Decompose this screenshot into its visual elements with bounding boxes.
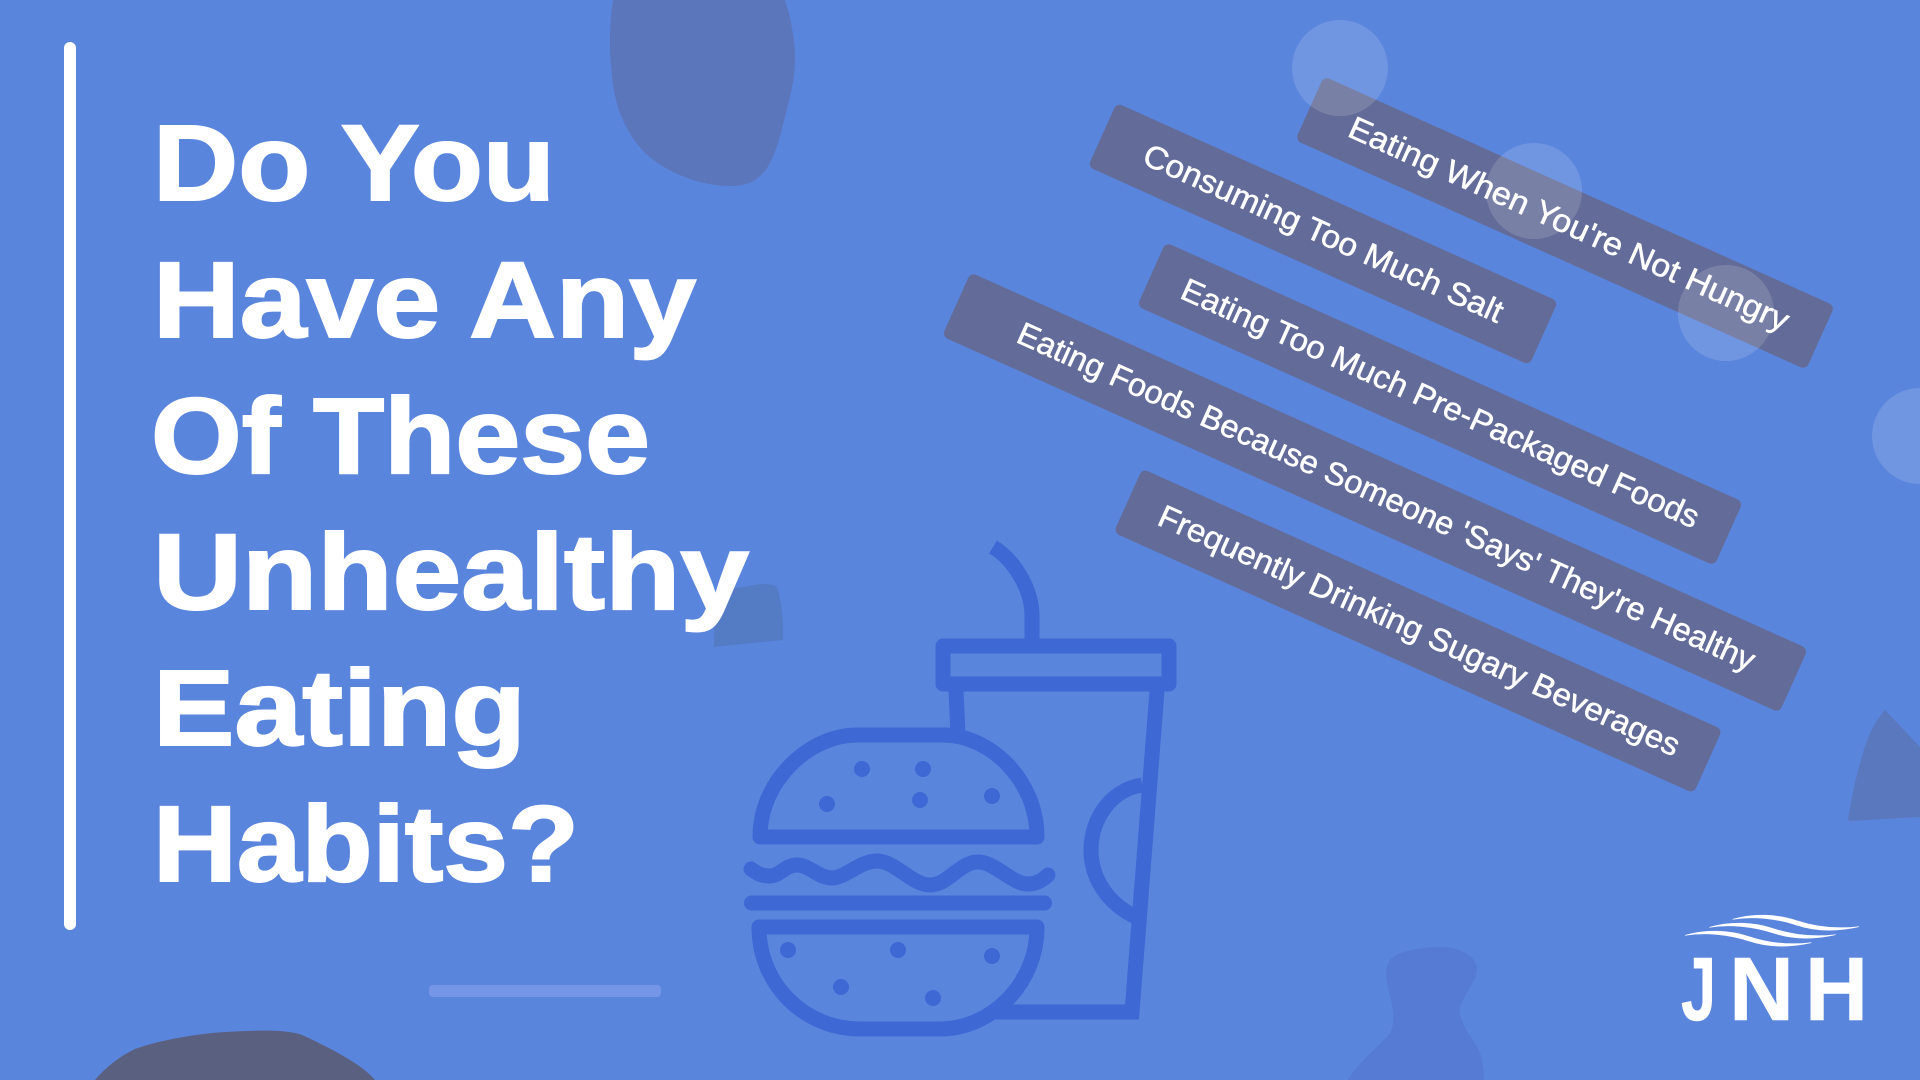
logo waves xyxy=(1685,915,1859,946)
blob: right edge xyxy=(1848,710,1920,821)
title xyxy=(151,102,749,904)
burger patty xyxy=(752,896,1044,910)
lettuce xyxy=(751,861,1048,885)
blob: behind title xyxy=(714,584,783,647)
blob: bottom left xyxy=(95,1031,375,1080)
decorative translucent circles xyxy=(1292,20,1920,484)
label: too much salt: Consuming Too Much Salt xyxy=(1138,137,1509,330)
label: someone says healthy: Eating Foods Because Someone 'Says' They're Healthy xyxy=(1012,315,1761,678)
title: Of These xyxy=(151,375,650,496)
title: Do You xyxy=(153,102,555,223)
label: eating when not hungry: Eating When You're Not Hungry xyxy=(1343,109,1795,338)
small horizontal bar xyxy=(429,985,661,997)
blob: top centre xyxy=(610,0,795,186)
logo letters: N xyxy=(1729,940,1794,1040)
title: Unhealthy xyxy=(153,511,749,632)
straw xyxy=(993,547,1032,640)
cup lid xyxy=(943,646,1169,684)
title: Have Any xyxy=(153,239,696,360)
label: eating when not hungry xyxy=(1295,76,1835,370)
icon: burger and drink xyxy=(751,547,1169,1029)
label: sugary beverages: Frequently Drinking Sugary Beverages xyxy=(1153,498,1686,763)
logo letters: J xyxy=(1681,940,1716,1040)
label: too much salt xyxy=(1088,103,1558,365)
cup body xyxy=(956,691,1157,1012)
label: someone says healthy xyxy=(942,272,1808,713)
sesame seeds xyxy=(780,761,1000,1006)
habit labels xyxy=(942,76,1835,793)
title: Eating xyxy=(153,647,526,768)
label: pre-packaged foods xyxy=(1137,242,1743,566)
logo: JNH xyxy=(1681,915,1868,1040)
vertical accent bar xyxy=(64,42,76,930)
cup emblem xyxy=(1091,785,1142,917)
label: pre-packaged foods: Eating Too Much Pre-Packaged Foods xyxy=(1176,271,1705,535)
blob: bottom centre xyxy=(1348,947,1484,1080)
top bun xyxy=(760,735,1037,837)
logo letters: H xyxy=(1805,940,1868,1040)
title: Habits? xyxy=(153,783,579,904)
label: sugary beverages xyxy=(1114,469,1722,793)
logo letters xyxy=(1681,940,1868,1040)
bottom bun xyxy=(759,927,1037,1029)
